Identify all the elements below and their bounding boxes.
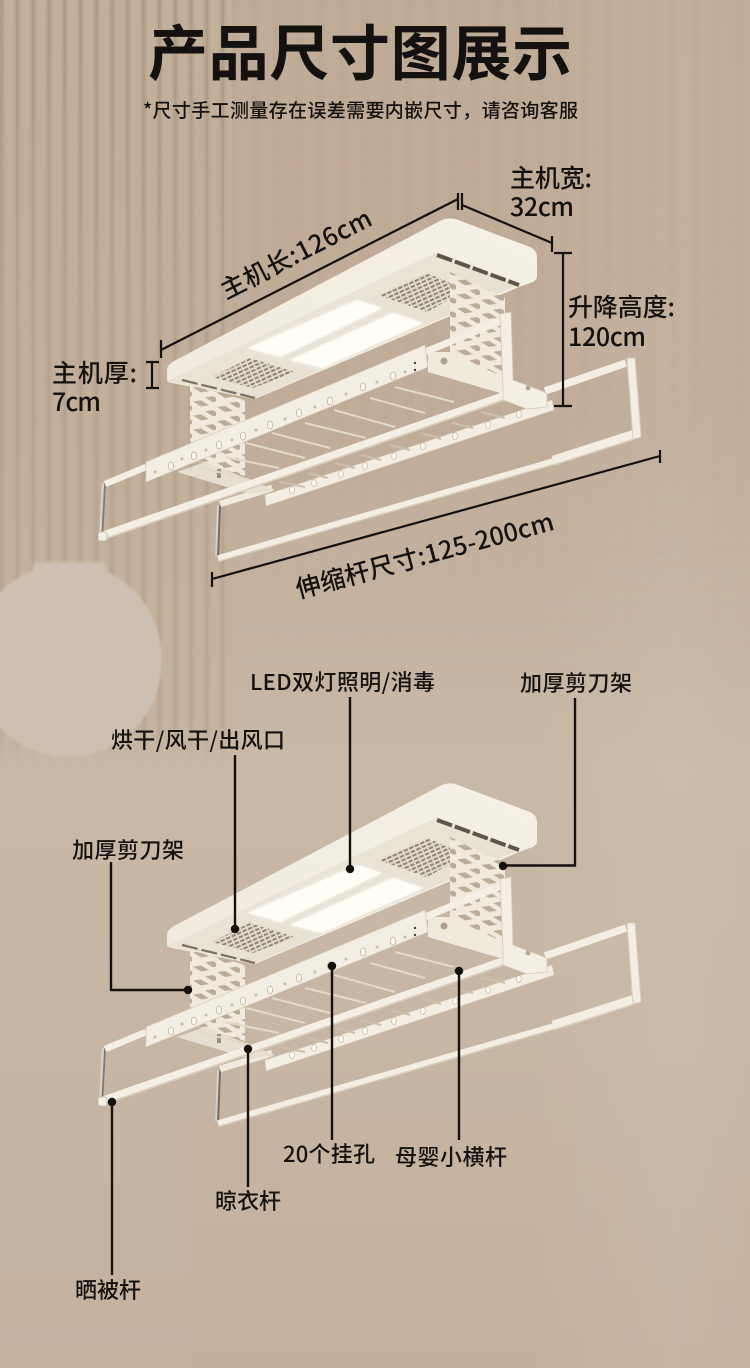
host unit body [167,218,537,399]
hinge joint [500,312,547,409]
callout: air outlet: 烘干/风干/出风口 [111,723,285,755]
small crossbar rail [265,400,554,506]
subtitle note: *尺寸手工测量存在误差需要内嵌尺寸，请咨询客服 [143,96,578,123]
dimension: width 32cm: 主机宽: [510,159,592,195]
title: 产品尺寸图展示 [148,6,572,93]
callout: LED lights: LED双灯照明/消毒 [250,665,435,697]
dimension: lift height 120cm: 120cm [568,318,646,354]
callout: quilt rod: 晒被杆 [75,1273,141,1305]
scissor lift arms [190,837,505,1041]
dimension: thickness 7cm: 主机厚: [52,354,137,390]
callout: clothes rod: 晾衣杆 [215,1184,281,1216]
LED light panels [248,865,423,933]
callout: scissor arm left [72,833,192,994]
dimension: width 32cm: 32cm [510,188,574,224]
callout: clothes rod [215,1045,281,1216]
drilled hanging bar [105,321,501,484]
drilled hanging bar [105,886,501,1049]
callout: air outlet [111,723,285,933]
LED light panels [248,300,423,368]
host unit body [167,783,537,964]
drying rods and frame [177,352,505,494]
callout: LED lights [250,665,435,873]
decorative round vase [0,562,162,757]
scissor lift arms [190,272,505,476]
rack product with feature callouts [98,783,641,1124]
dimension: telescopic rod 125-200cm [212,450,660,606]
telescopic outer frame [100,358,641,559]
dimension: telescopic rod 125-200cm: 伸缩杆尺寸:125-200cm [291,503,558,606]
telescopic outer frame [100,923,641,1124]
dimension: length 126cm: 主机长:126cm [213,199,378,307]
callout: scissor arm left: 加厚剪刀架 [72,833,184,865]
air vents [212,273,455,388]
dimension: lift height 120cm: 升降高度: [568,288,675,324]
drying rods and frame [177,917,505,1059]
callout: scissor arm right [499,666,632,870]
callout: 20 hanging holes [283,962,375,1169]
small crossbar rail [265,965,554,1071]
long clothes rod [98,960,505,1106]
dimension: thickness 7cm [52,354,159,419]
hinge joint [500,877,547,974]
callout: scissor arm right: 加厚剪刀架 [520,666,632,698]
callout: quilt rod [75,1098,141,1305]
rack product with dimensions [98,218,641,559]
callout: 20 hanging holes: 20个挂孔 [283,1137,375,1169]
dimension: length 126cm [161,193,458,358]
dimension: lift height 120cm [554,253,675,406]
callout: baby crossbar: 母婴小横杆 [395,1140,507,1172]
dimension: width 32cm [462,159,592,252]
long clothes rod [98,395,505,541]
callout: baby crossbar [395,967,507,1172]
dimension: thickness 7cm: 7cm [52,383,101,419]
air vents [212,838,455,953]
